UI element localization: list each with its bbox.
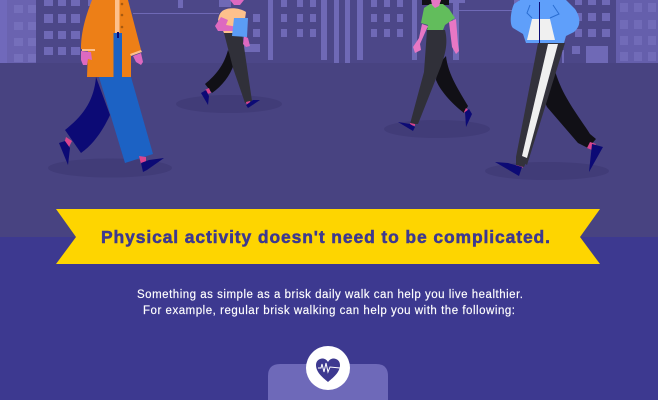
- intro text: For example, regular brisk walking can help you with the following:: [143, 305, 515, 317]
- figure: woman in green shirt: [398, 0, 472, 131]
- ground shadows: [48, 95, 609, 180]
- banner heading: Physical activity doesn't need to be complicated.: [101, 227, 550, 247]
- icon: heart with pulse: [306, 346, 350, 390]
- figure: walker with blue folder: [201, 0, 260, 108]
- figure: woman in orange coat: [59, 0, 164, 172]
- card: heart health: [268, 346, 388, 400]
- ribbon shape: [56, 209, 600, 264]
- figure: man in blue hoodie: [495, 0, 603, 176]
- intro text: Something as simple as a brisk daily walk can help you live healthier.: [137, 289, 523, 301]
- city skyline: [0, 0, 658, 63]
- banner: [56, 209, 600, 264]
- intro text: [137, 289, 523, 317]
